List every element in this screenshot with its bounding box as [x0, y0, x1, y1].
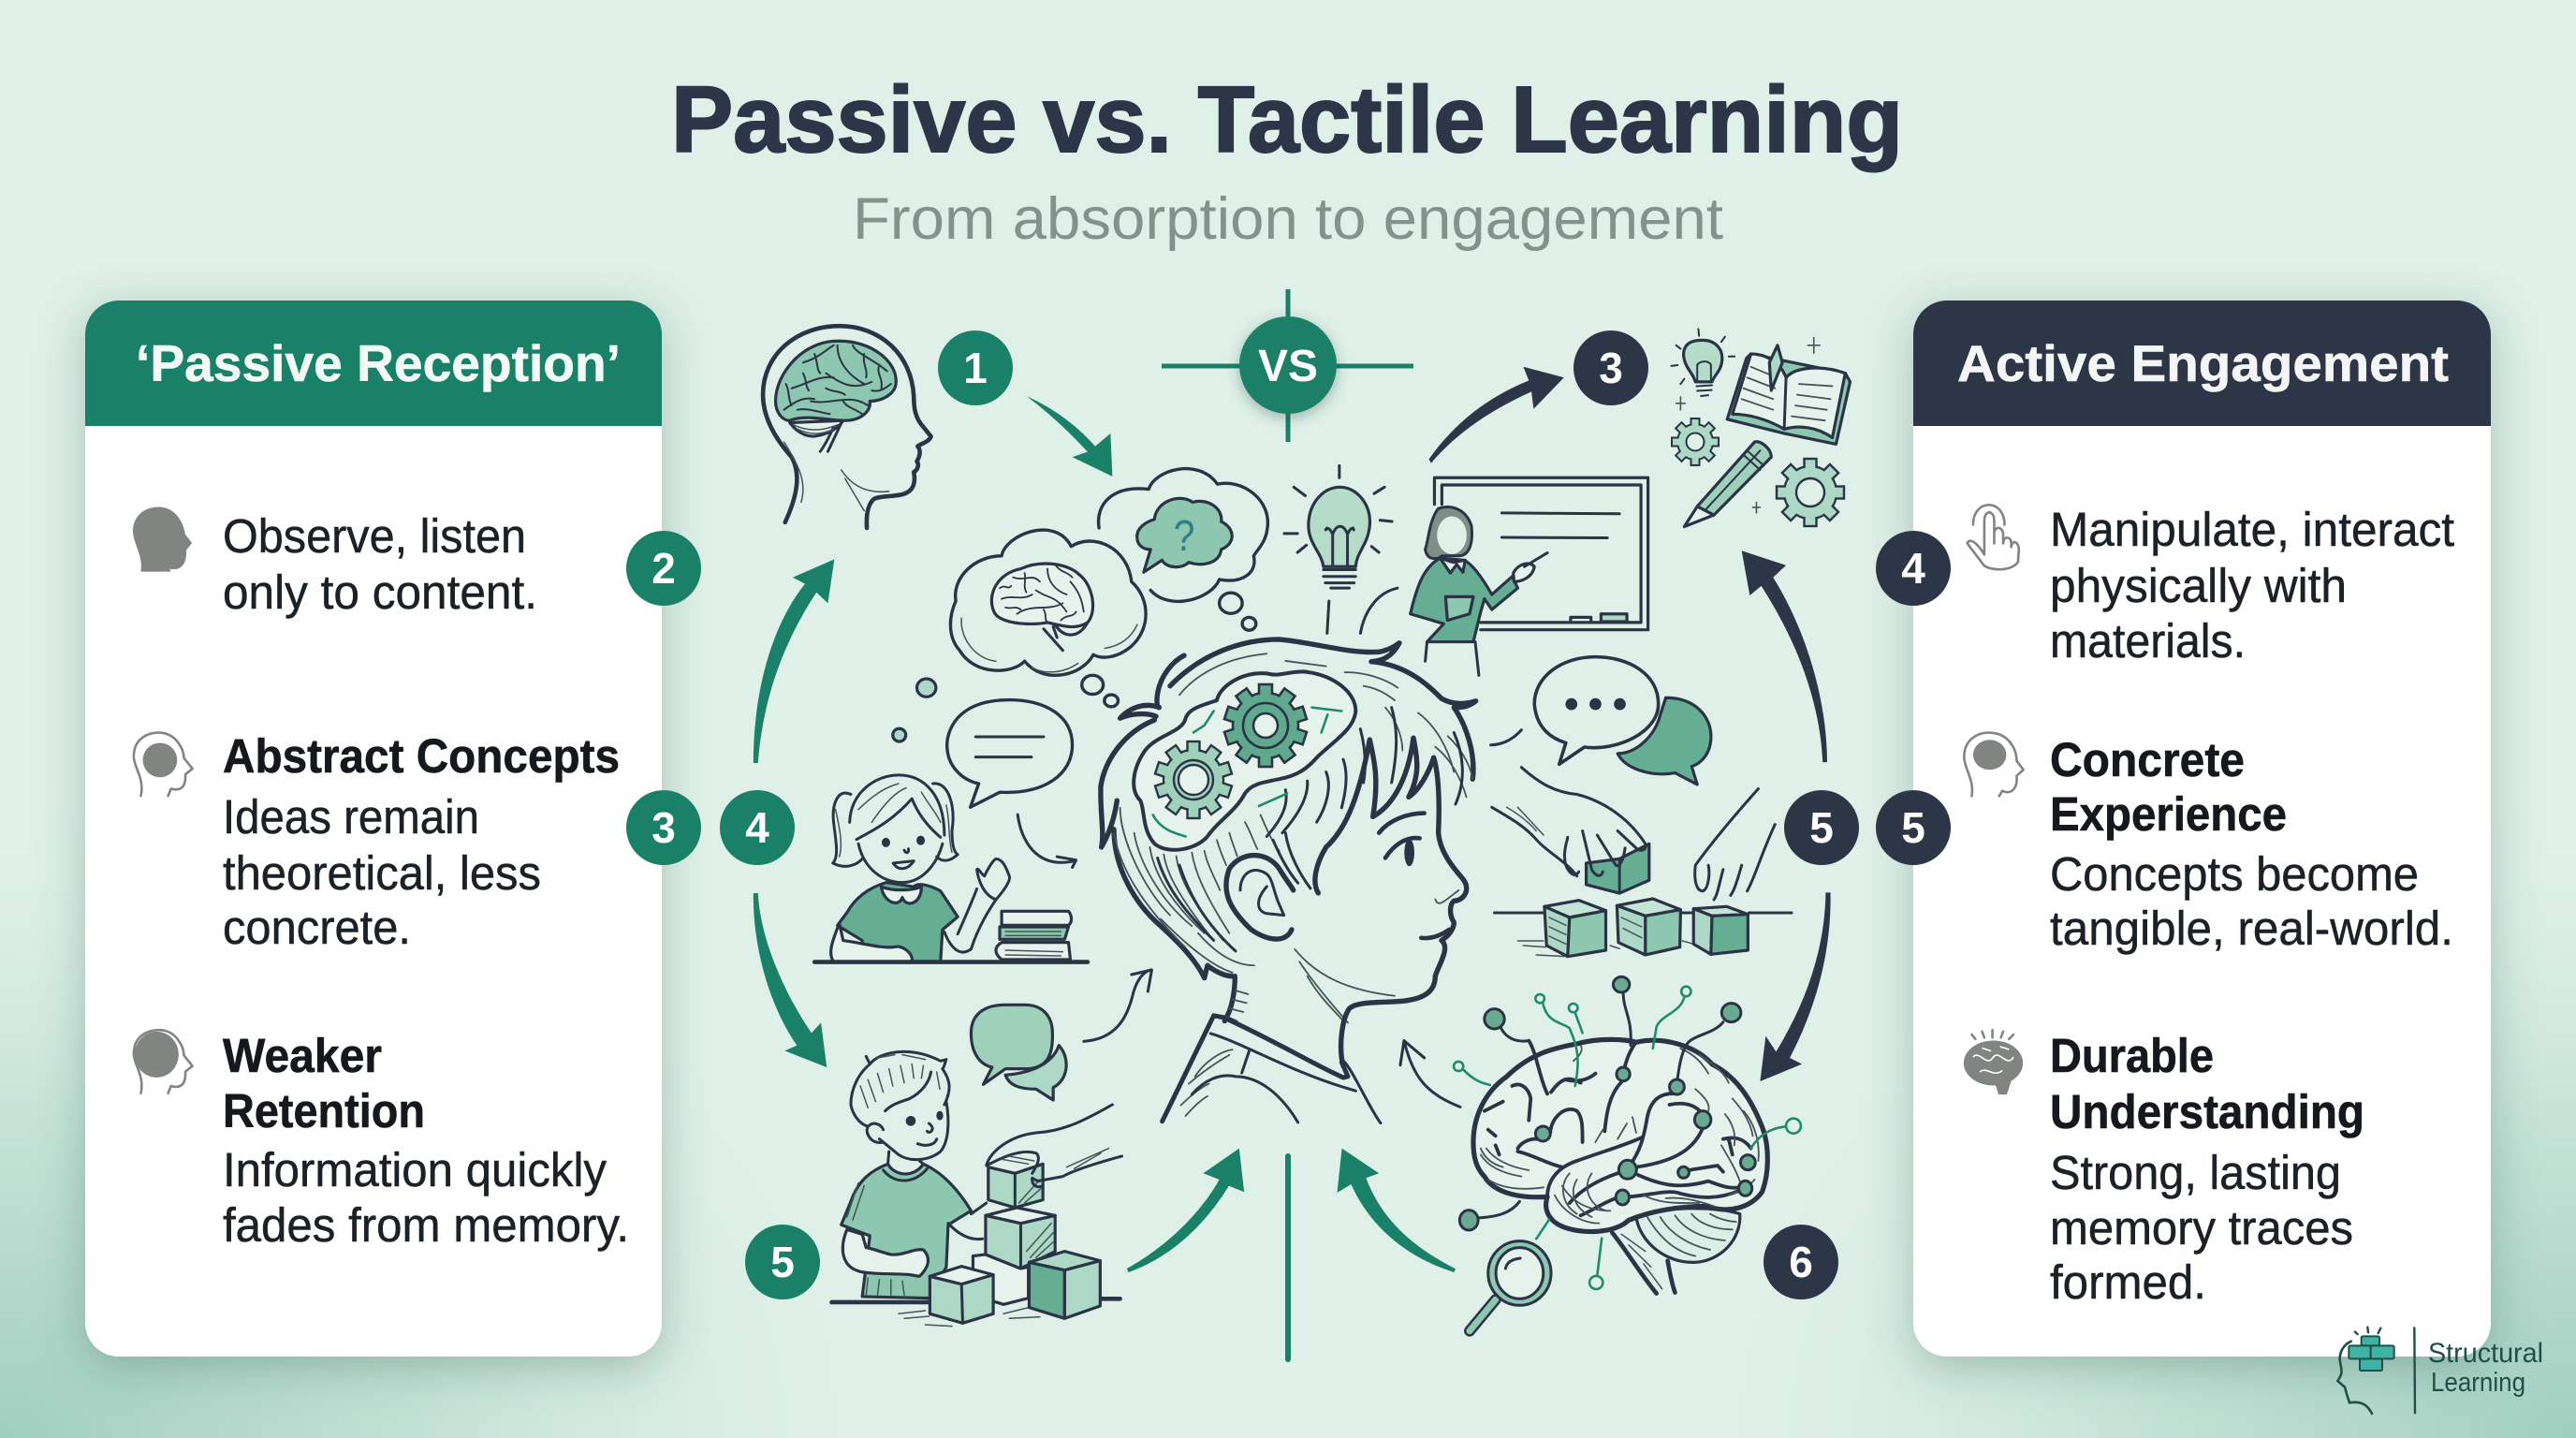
illustration: head profile with brain: [763, 326, 931, 528]
text: abstract concepts: theoretical, less: [223, 846, 541, 900]
badge: 6: 6: [1789, 1238, 1813, 1286]
decoration: small green bubbles: [893, 679, 936, 741]
text: durable understanding: Strong, lasting: [2050, 1146, 2341, 1199]
arrow: dark curve up to tools: [1742, 550, 1827, 762]
arrow: blocks to central head: [1127, 1149, 1244, 1272]
sub: neuron stalks: [1477, 992, 1723, 1218]
sub: hair strands: [1114, 653, 1472, 1116]
sub: neural traces: [1153, 708, 1341, 836]
text: concrete experience: tangible, real-world.: [2050, 902, 2453, 955]
icon: head with brain outline: [134, 733, 193, 796]
divider line: bottom centre: [1285, 1156, 1291, 1359]
text: durable understanding: Durable: [2050, 1029, 2214, 1082]
logo: structural learning: Learning: [2431, 1368, 2525, 1398]
text: weaker retention: fades from memory.: [223, 1198, 629, 1252]
sub: collar and shoulders: [1163, 1016, 1348, 1122]
icon: dark gear: [1224, 684, 1307, 767]
badge: 5 centre right: 5: [1809, 803, 1834, 852]
panel header: [85, 301, 662, 426]
illustration: thought cloud with brain: [950, 530, 1146, 707]
badge: 3 right: [1573, 330, 1648, 405]
badge: 5 centre right: [1784, 790, 1859, 865]
text: concrete experience: [2050, 733, 2453, 955]
icon: solid head: [133, 507, 192, 572]
sub: ear: [1226, 856, 1294, 939]
icon: small tool gear: [1672, 418, 1719, 465]
text: abstract concepts: Ideas remain: [223, 790, 479, 844]
panel header: Active Engagement: [1957, 334, 2449, 392]
text: durable understanding: memory traces: [2050, 1201, 2353, 1255]
icon: vs badge with cross lines: VS: [1258, 342, 1318, 391]
sub: fringe, face, chin: [1315, 738, 1467, 1065]
text: manipulate: materials.: [2050, 614, 2246, 668]
arrow: thin curve to head: [1017, 814, 1076, 868]
icon: pencil: [1684, 442, 1771, 527]
sub: arrow into neck: [1400, 1041, 1460, 1107]
text: durable understanding: Understanding: [2050, 1085, 2364, 1138]
text: abstract concepts: [223, 729, 620, 954]
illustration: central child profile: [1101, 639, 1476, 1123]
text: abstract concepts: Abstract Concepts: [223, 729, 620, 783]
logo: structural learning: Structural: [2428, 1338, 2543, 1369]
panel header: [1913, 301, 2491, 426]
badge: 2: [626, 531, 701, 606]
illustration: thought cloud with question: ?: [1174, 513, 1194, 561]
illustration: neural brain with magnifier: [1454, 976, 1801, 1331]
badge: 5 on card: [1876, 790, 1951, 865]
icon: sparkles: [1676, 338, 1820, 513]
badge: 3 left: [626, 790, 701, 865]
text: manipulate: physically with: [2050, 559, 2347, 612]
badge: 4 left: [720, 790, 795, 865]
icon: small bulb: [1672, 329, 1734, 396]
icon: glowing brain: [1964, 1030, 2023, 1094]
badge: 2: 2: [651, 544, 676, 593]
badge: 3 right: 3: [1599, 344, 1623, 392]
arrow: 1 to thought cloud: [1027, 396, 1112, 477]
sub: mind region: [1134, 671, 1355, 850]
sub: neuron nodes: [1459, 976, 1755, 1230]
badge: 6: [1764, 1225, 1838, 1299]
badge: 5 left: [745, 1225, 820, 1299]
text: manipulate: [2050, 503, 2454, 668]
arrow: up to head profile: [754, 559, 834, 763]
badge: 4 right: [1876, 531, 1951, 606]
panel background: [1913, 301, 2491, 1357]
badge: 5 on card: 5: [1901, 803, 1925, 852]
illustration: boy chat bubbles: [971, 970, 1151, 1100]
illustration: book stack: [996, 911, 1072, 960]
text: concrete experience: Concepts become: [2050, 847, 2419, 901]
illustration: tools cluster with bulb book pencil: [1672, 329, 1850, 527]
badge: 4 right: 4: [1901, 544, 1925, 593]
text: durable understanding: [2050, 1029, 2364, 1309]
badge: 1: [938, 330, 1013, 405]
icon: pointing hand: [1968, 505, 2019, 569]
panel: active engagement: [1913, 301, 2491, 1357]
text: weaker retention: Weaker: [223, 1029, 382, 1082]
text: observe: only to content.: [223, 565, 537, 619]
badge: 3 left: 3: [651, 803, 676, 852]
arrow: brain to central head: [1337, 1149, 1456, 1272]
text: abstract concepts: concrete.: [223, 901, 411, 954]
illustration: teacher at whiteboard: [1411, 477, 1648, 675]
arrow: down to boy with blocks: [754, 893, 827, 1067]
title: Passive vs. Tactile Learning: [671, 67, 1903, 172]
text: manipulate: Manipulate, interact: [2050, 503, 2454, 556]
illustration: row of three blocks: [1495, 899, 1792, 957]
arrow: dark curve down to brain: [1760, 892, 1831, 1081]
icon: light gear: [1155, 741, 1232, 818]
text: observe: Observe, listen: [223, 509, 526, 563]
logo: structural learning: [2337, 1328, 2543, 1414]
subtitle: From absorption to engagement: [853, 186, 1724, 252]
illustration: thought cloud with question: [1099, 469, 1267, 630]
icon: open book: [1727, 345, 1850, 444]
arrow: dark curve to 3: [1429, 367, 1564, 463]
badge: 4 left: 4: [745, 803, 769, 852]
icon: head with solid mind: [1964, 733, 2024, 796]
icon: vs badge with cross lines: [1162, 289, 1413, 442]
text: durable understanding: formed.: [2050, 1255, 2206, 1309]
badge: 5 left: 5: [770, 1238, 795, 1286]
panel header: ‘Passive Reception’: [136, 334, 621, 392]
text: concrete experience: Concrete: [2050, 733, 2245, 786]
illustration: boy building with blocks: [832, 1051, 1122, 1327]
illustration: chat bubbles with dots: [1491, 657, 1711, 785]
text: concrete experience: Experience: [2050, 787, 2287, 841]
sub: hair outline: [1101, 639, 1476, 1021]
illustration: light bulb: [1284, 465, 1398, 633]
icon: large tool gear: [1777, 459, 1844, 526]
text: weaker retention: [223, 1029, 629, 1252]
panel: passive reception: [85, 301, 662, 1357]
panel background: [85, 301, 662, 1357]
text: observe: [223, 509, 537, 619]
text: weaker retention: Information quickly: [223, 1143, 607, 1196]
badge: 1: 1: [963, 344, 988, 392]
illustration: girl speech bubble: [947, 700, 1073, 807]
text: weaker retention: Retention: [223, 1084, 425, 1137]
illustration: hands placing blocks: [1492, 768, 1775, 900]
icon: magnifier: [1470, 1241, 1551, 1331]
illustration: girl at desk: [814, 775, 1088, 962]
icon: head with fading brain: [134, 1030, 193, 1093]
